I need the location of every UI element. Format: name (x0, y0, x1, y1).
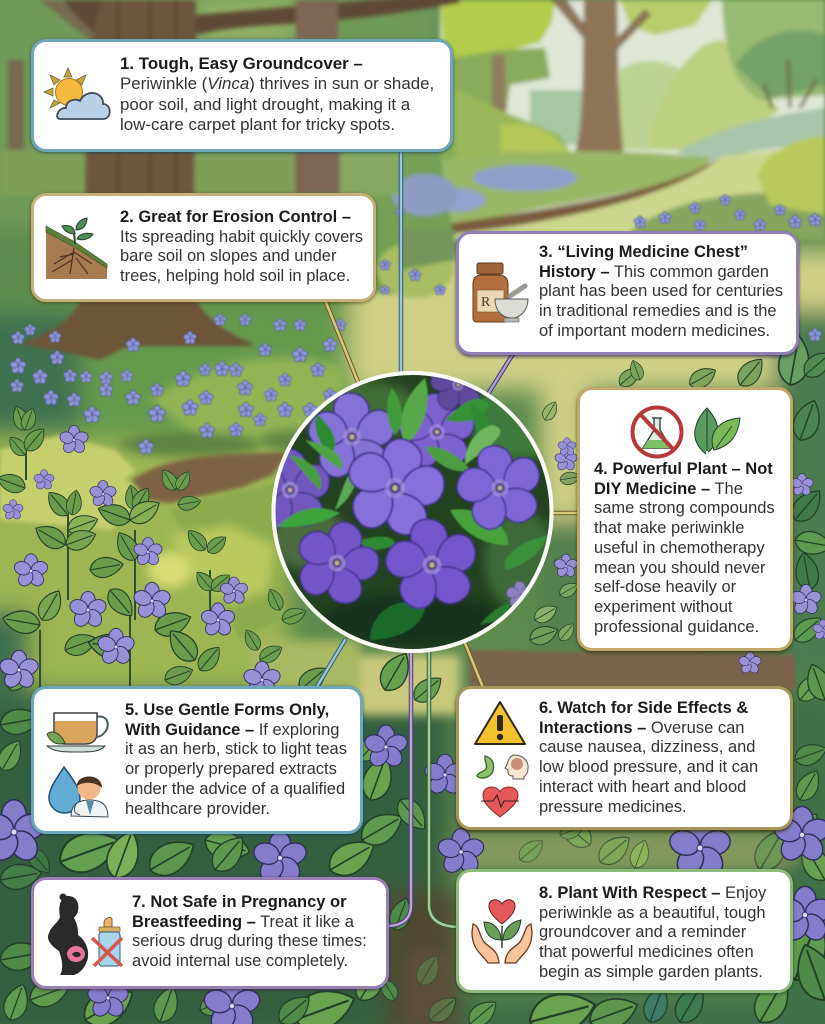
icon: tea cup, water drop and doctor (46, 712, 109, 818)
text: card 3: of important modern medicines. (539, 322, 770, 340)
flowering groundcover bed (0, 300, 345, 640)
large periwinkle foliage, lower page (0, 647, 825, 1024)
text: card 3: History – This common garden (539, 263, 769, 281)
text: card 8 (539, 884, 766, 981)
text: card 5: healthcare provider. (125, 800, 270, 818)
icon: warning, stomach, head and heart (474, 701, 529, 818)
woodland trees, canopy and hillside (0, 0, 825, 345)
soil path (468, 650, 795, 690)
panel: 6 side effects (456, 686, 793, 830)
text: card 3: plant has been used for centuries (539, 282, 783, 300)
small blue flower drifts (9, 194, 822, 455)
panel: 8 plant with respect (456, 869, 793, 993)
text: card 1: low-care carpet plant for tricky spots. (120, 115, 395, 134)
text: card 6: low blood pressure, and it can (539, 758, 758, 776)
text: card 5: it as an herb, stick to light teas (125, 740, 347, 758)
icon: no DIY flask and leaves (630, 406, 741, 458)
text: card 7: avoid internal use completely. (132, 952, 348, 970)
text: card 4: self-dose heavily or (594, 578, 736, 596)
text: card 8: groundcover and a reminder (539, 923, 746, 941)
text: card 4: 4. Powerful Plant – Not (594, 460, 773, 478)
panel: 1 tough groundcover (31, 39, 453, 152)
text: card 4: mean you should never (594, 559, 766, 577)
panel: 2 erosion control (31, 193, 376, 302)
text: card 2: 2. Great for Erosion Control – (120, 208, 351, 226)
text: card 3 (539, 243, 783, 340)
text: card 3: in traditional remedies and is the (539, 302, 777, 320)
text: card 7: 7. Not Safe in Pregnancy or (132, 893, 347, 911)
text: card 1: Periwinkle (Vinca) thrives in sun or shade, (120, 74, 434, 93)
icon: plant on slope with roots (46, 217, 108, 279)
text: card 5: 5. Use Gentle Forms Only, (125, 701, 329, 719)
text: card 4 (594, 460, 775, 636)
panel: 3 medicine chest history (456, 231, 799, 355)
panel: 7 pregnancy (31, 877, 389, 989)
connector: card 4 (552, 511, 580, 515)
text: card 5: or properly prepared extracts (125, 760, 337, 778)
connector: card 8 (429, 650, 458, 927)
text: card 1: poor soil, and light drought, making it a (120, 95, 410, 114)
text: card 4: same strong compounds (594, 499, 775, 517)
text: card 2: Its spreading habit quickly covers (120, 228, 363, 246)
icon: medicine bottle and mortar (472, 262, 528, 322)
text: card 5: With Guidance – If exploring (125, 721, 339, 739)
text: card 8: begin as simple garden plants. (539, 963, 763, 981)
right-side shrub leaves (527, 333, 825, 704)
text: card 1: 1. Tough, Easy Groundcover – (120, 54, 363, 73)
text: card 5 (125, 701, 347, 818)
text: card 1 (120, 54, 434, 134)
shrub and groundcover leaves, left (0, 404, 332, 700)
icon: pregnant silhouette and crossed bottle (48, 894, 124, 975)
text: card 8: that powerful medicines often (539, 943, 754, 961)
text: card 4: DIY Medicine – The (594, 480, 743, 498)
text: card 7: serious drug during these times: (132, 932, 367, 950)
connector lines (315, 150, 580, 927)
text: card 6 (539, 699, 758, 816)
connector: card 5 (315, 640, 345, 690)
panel: 5 gentle forms (31, 686, 363, 834)
connector: card 7 (388, 650, 411, 926)
text: card 2 (120, 208, 363, 285)
central periwinkle photo (272, 371, 554, 653)
icon: hands holding heart plant (471, 899, 533, 964)
text: card 5: under the advice of a qualified (125, 780, 345, 798)
connector: card 1 (399, 150, 403, 376)
icon: medicine bottle and mortar: R (481, 295, 491, 310)
connector: card 6 (465, 643, 484, 690)
text: card 8: periwinkle as a beautiful, tough (539, 904, 766, 922)
text: card 4: that make periwinkle (594, 519, 744, 537)
text: card 6: Interactions – Overuse can (539, 719, 744, 737)
text: card 2: bare soil on slopes and under (120, 247, 336, 265)
text: card 6: 6. Watch for Side Effects & (539, 699, 748, 717)
icon: sun and cloud (43, 67, 111, 120)
purple periwinkle blooms (0, 425, 825, 1024)
text: card 3: 3. “Living Medicine Chest” (539, 243, 748, 261)
text: card 6: pressure medicines. (539, 798, 687, 816)
text: card 6: cause nausea, dizziness, and (539, 738, 755, 756)
text: card 4: experiment without (594, 598, 732, 616)
text: card 8: 8. Plant With Respect – Enjoy (539, 884, 766, 902)
text: card 7 (132, 893, 367, 970)
connector: card 2 (325, 300, 358, 382)
text: card 4: professional guidance. (594, 618, 759, 636)
panel: 4 powerful plant (577, 387, 793, 651)
text: card 7: Breastfeeding – Treat it like a (132, 913, 354, 931)
text: card 4: useful in chemotherapy (594, 539, 765, 557)
text: card 2: trees, helping hold soil in place. (120, 267, 350, 285)
connector: card 3 (488, 354, 513, 394)
text: card 6: interact with heart and blood (539, 778, 746, 796)
